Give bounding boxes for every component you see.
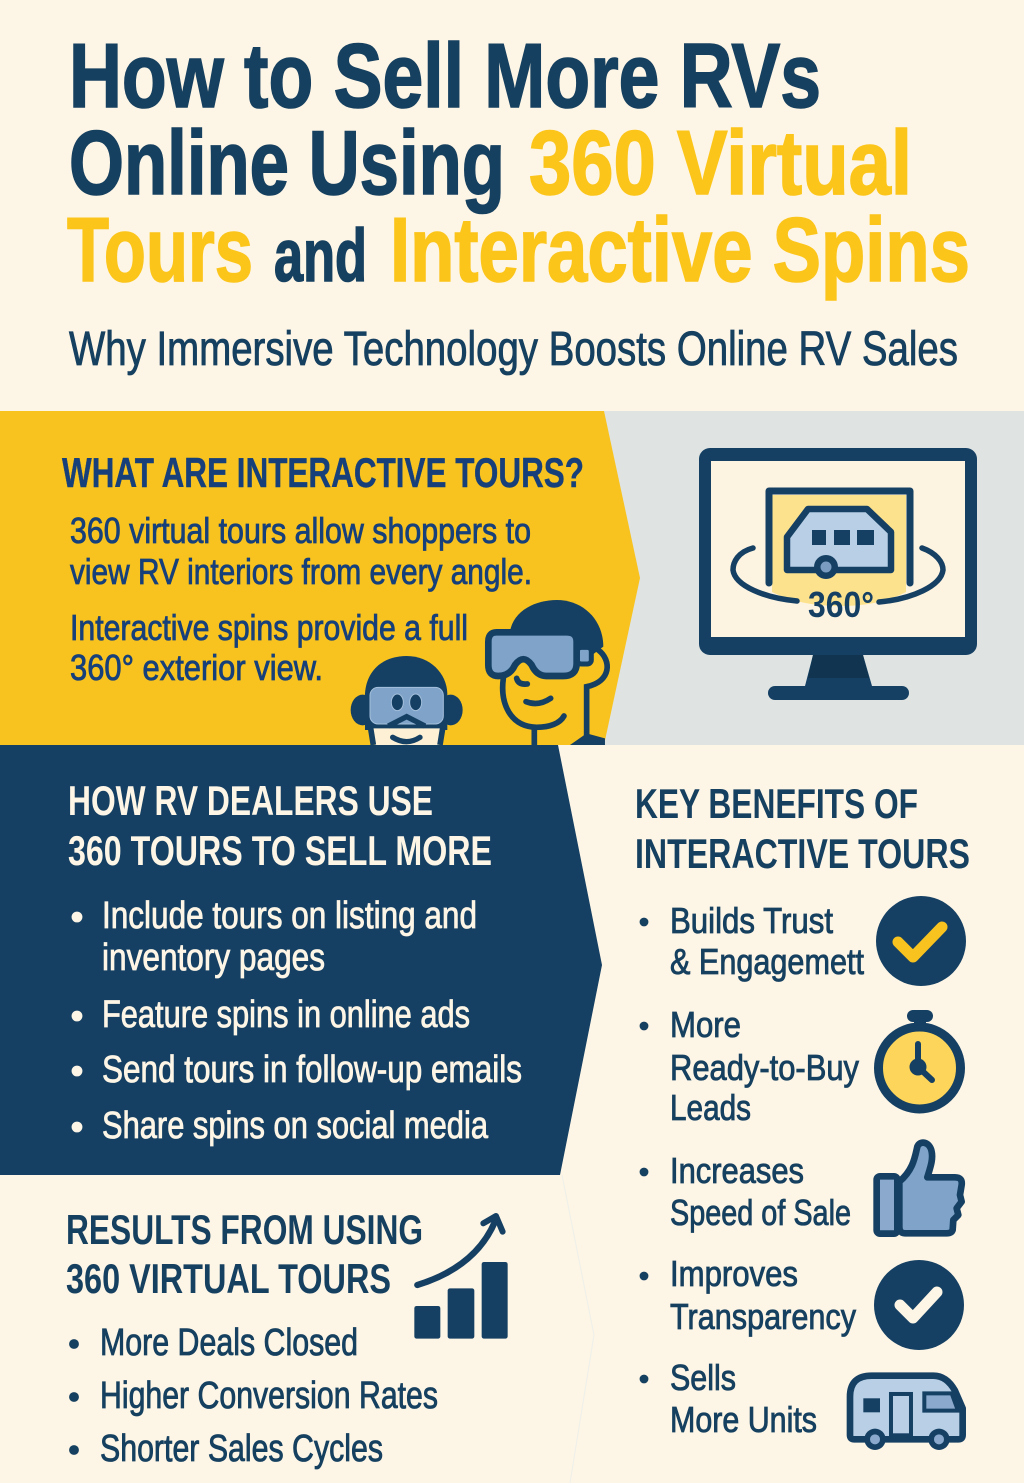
benefit list: Builds Trust [670, 900, 833, 941]
heading: HOW RV DEALERS USE [68, 777, 433, 824]
icon: thumbs up [877, 1143, 962, 1234]
title: and [274, 214, 367, 297]
bullet list: Shorter Sales Cycles [100, 1428, 383, 1470]
bullet list: More Deals Closed [100, 1322, 358, 1364]
icon: rising bar chart [414, 1216, 508, 1339]
heading: 360 VIRTUAL TOURS [66, 1255, 391, 1302]
bullet list [72, 895, 522, 1147]
panel: how RV dealers use 360 tours [0, 745, 602, 1175]
icon: people wearing VR headsets [351, 600, 607, 745]
title [67, 26, 970, 301]
bullet list: Send tours in follow-up emails [102, 1049, 522, 1091]
bullet list [70, 1322, 438, 1470]
bullet list: Higher Conversion Rates [100, 1375, 438, 1417]
icon: monitor with 360 camper: 360° [808, 584, 874, 625]
title: Tours [67, 200, 253, 301]
panel: results from using 360 virtual tours [66, 1175, 594, 1483]
benefit list [640, 900, 864, 1440]
benefit list: & Engagemett [670, 941, 864, 982]
icon: monitor with 360 camper [699, 448, 977, 700]
benefit list: Transparency [670, 1296, 856, 1337]
panel: what are interactive tours [0, 411, 640, 745]
benefit list: More Units [670, 1399, 817, 1440]
benefit list: Ready-to-Buy [670, 1047, 859, 1088]
text block: description: 360° exterior view. [70, 647, 323, 688]
heading [66, 1206, 423, 1302]
text block: description: 360 virtual tours allow shoppers to [70, 510, 531, 551]
text block: description: view RV interiors from every angle. [70, 551, 532, 592]
text block: description: Interactive spins provide a full [70, 607, 468, 648]
heading [635, 780, 970, 877]
text block: description [70, 510, 532, 688]
benefit list: Sells [670, 1357, 736, 1398]
heading: WHAT ARE INTERACTIVE TOURS? [62, 449, 584, 496]
panel: key benefits [635, 780, 970, 1450]
icon: stopwatch [878, 1010, 960, 1109]
benefit list: Improves [670, 1253, 798, 1294]
benefit list: More [670, 1004, 741, 1045]
benefit list: Leads [670, 1087, 751, 1128]
icon: RV [850, 1376, 963, 1450]
bullet list: Share spins on social media [102, 1105, 489, 1147]
icon: yellow check badge [876, 896, 966, 986]
heading [68, 777, 492, 874]
bullet list: Feature spins in online ads [102, 994, 470, 1036]
bullet list: inventory pages [102, 937, 325, 979]
heading: KEY BENEFITS OF [635, 780, 918, 827]
panel: 360 monitor backdrop [600, 411, 1024, 745]
title: 360 Virtual [529, 113, 912, 214]
heading: RESULTS FROM USING [66, 1206, 423, 1253]
title: How to Sell More RVs [69, 26, 821, 127]
heading: 360 TOURS TO SELL MORE [68, 827, 492, 874]
icon: white check badge [874, 1260, 964, 1350]
bullet list: Include tours on listing and [102, 895, 477, 937]
benefit list: Speed of Sale [670, 1192, 851, 1233]
benefit list: Increases [670, 1150, 804, 1191]
title: Online Using [69, 113, 505, 214]
